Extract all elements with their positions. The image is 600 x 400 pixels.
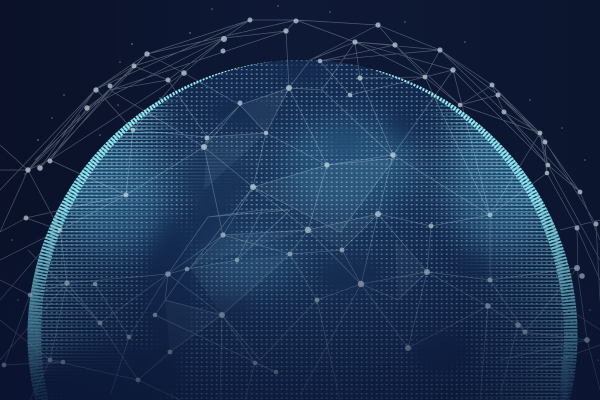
continent glow [65, 115, 550, 295]
translucent network triangles [165, 88, 428, 352]
globe sphere [28, 60, 578, 400]
bright globe rim [40, 72, 566, 400]
latitude stripes near rim [28, 92, 578, 400]
dotted continents [30, 60, 578, 399]
